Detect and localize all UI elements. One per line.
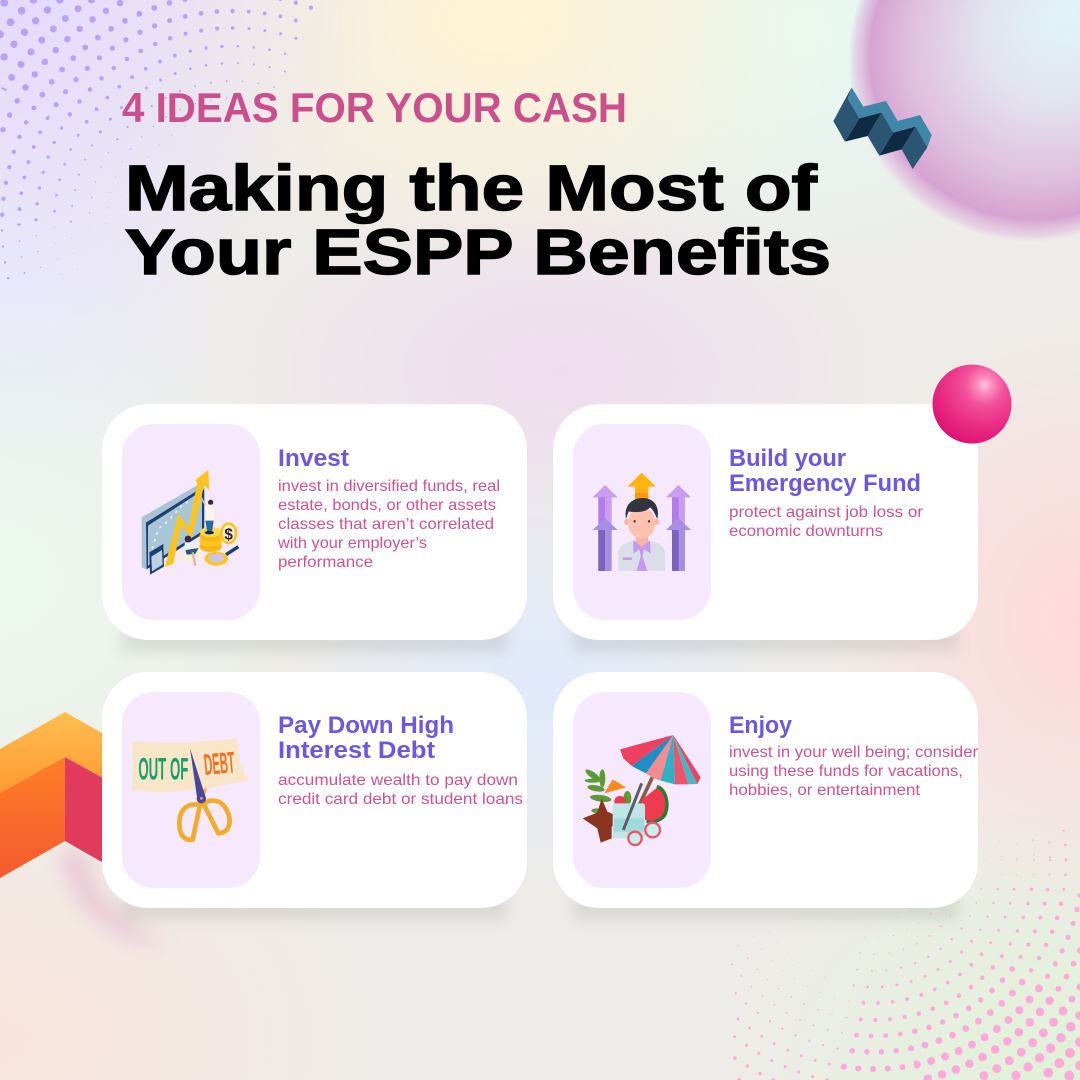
dots: top left halftone [0,0,314,280]
card background [102,404,527,640]
title: Making the Most of [125,152,818,224]
subtitle: 4 IDEAS FOR YOUR CASH [122,84,627,131]
icon: person with rising arrows [593,473,691,571]
panel: invest [102,404,527,640]
body text [278,772,523,808]
icon: out of debt scissors: DEBT [203,746,236,782]
card background [553,672,978,908]
icon: beach umbrella and drink [583,735,701,845]
body text: with your employer’s [277,535,427,552]
body text: credit card debt or student loans [278,791,523,808]
body text: performance [278,554,373,571]
shape: blue 3D zigzag [833,87,932,169]
icon panel [573,692,711,888]
card background [102,672,527,908]
title: Your ESPP Benefits [125,216,831,288]
body text: using these funds for vacations, [729,763,963,780]
card background [553,404,978,640]
card shadows [122,628,958,920]
panel: enjoy [553,672,979,908]
shape: orange 3D chevron [0,712,130,878]
body text: economic downturns [729,523,883,540]
heading: Enjoy [729,712,793,739]
heading: Build your [729,445,846,472]
body text [729,744,979,799]
body text: hobbies, or entertainment [729,782,921,799]
heading: Pay Down High [278,712,454,739]
heading: Emergency Fund [729,470,921,497]
heading [278,712,454,764]
body text [277,478,500,571]
body text: estate, bonds, or other assets [278,497,496,514]
panel: pay down debt [102,672,527,908]
icon: out of debt scissors: OUT OF [138,751,188,786]
heading: Interest Debt [278,737,435,764]
icon panel [573,424,711,620]
heading [729,445,921,497]
body text: invest in your well being; consider [729,744,979,761]
icon: growth chart with coins: $ [224,527,233,544]
panel: emergency fund [553,404,978,640]
icon: growth chart with coins [142,470,238,575]
icon panel [122,424,260,620]
body text: accumulate wealth to pay down [278,772,518,789]
shape: pink ball [932,364,1012,444]
blob: top right gradient sphere [840,0,1080,250]
body text: invest in diversified funds, real [278,478,500,495]
blob: lower left pink smudge [60,850,170,946]
dots: bottom right halftone [732,830,1080,1080]
heading: Invest [278,445,349,472]
body text: protect against job loss or [729,504,924,521]
body text: classes that aren’t correlated [278,516,494,533]
body text [729,504,924,540]
icon panel [122,692,260,888]
title [125,152,831,288]
icon: out of debt scissors [132,738,248,840]
